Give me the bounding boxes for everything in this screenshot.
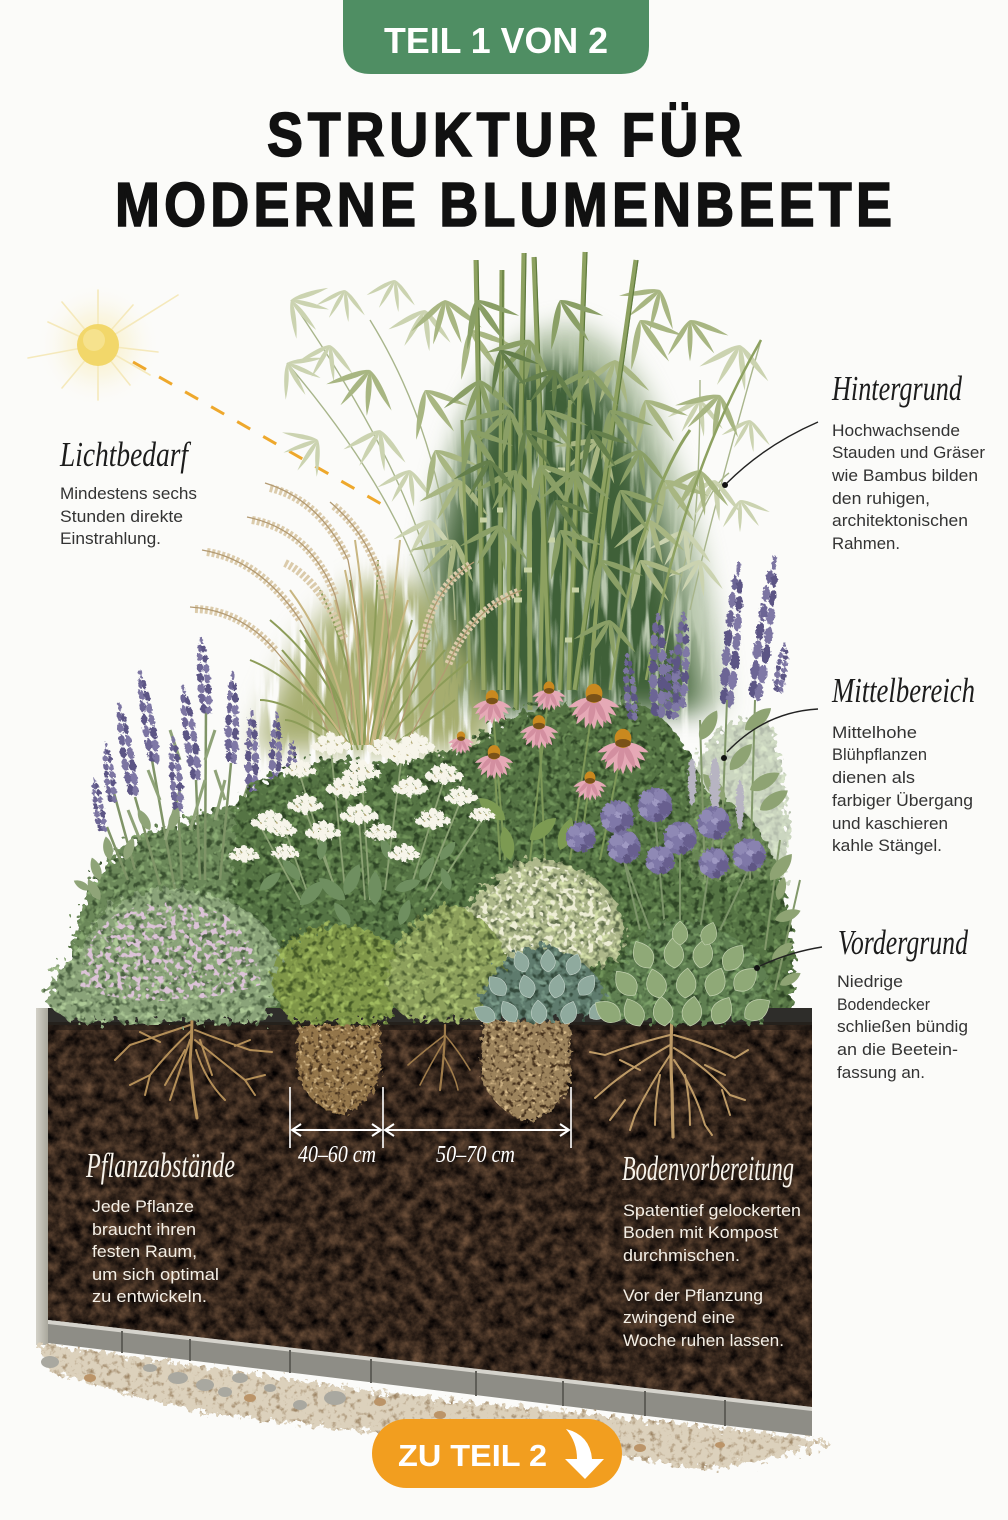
text block: Pflanzabstände: zu entwickeln. [92,1287,207,1306]
text block: Hintergrund: wie Bambus bilden [831,466,978,485]
text block: Lichtbedarf: Stunden direkte [60,507,183,526]
dimension marks: plant spacing: 40–60 cm [298,1142,376,1168]
root ball left [297,1025,381,1115]
text block: Pflanzabstände: Pflanzabstände [85,1146,235,1185]
text block: Hintergrund: den ruhigen, [832,489,930,508]
text block: Pflanzabstände: um sich optimal [92,1265,219,1284]
raised bed soil cross-section [36,1008,812,1408]
text block: Vordergrund: fassung an. [837,1063,925,1082]
text block: Mittelbereich: und kaschieren [832,814,948,833]
header tab: part indicator [343,0,649,74]
text block: Mittelbereich [831,671,975,855]
text block: Mittelbereich: Blühpflanzen [832,745,927,764]
text block: Pflanzabstände: braucht ihren [92,1220,196,1239]
lavender spikes left [88,636,298,833]
dimension marks: plant spacing [290,1087,571,1168]
text block: Mittelbereich: kahle Stängel. [832,836,942,855]
text block: Vordergrund: schließen bündig [837,1017,968,1036]
text block: Mittelbereich: farbiger Übergang [832,791,973,810]
text block: Mittelbereich: Mittelhohe [832,723,917,742]
text block: Bodenvorbereitung: Spatentief gelockerten [623,1201,801,1220]
text block: Lichtbedarf: Mindestens sechs [60,484,197,503]
yarrow leaves and stems [257,750,482,928]
title: MODERNE BLUMENBEETE [115,171,892,240]
pale cream-green mound [461,860,625,976]
text block: Vordergrund: Niedrige [837,972,903,991]
yellow-green mound one [272,925,401,1022]
blue-grey hosta [470,945,613,1027]
text block: Pflanzabstände [85,1146,235,1306]
icon: curved down arrow [565,1429,604,1479]
ornamental grass with plumes [190,483,522,750]
title [115,101,892,240]
roots of perennial left [115,1010,272,1118]
echinacea stems and flowers [448,681,650,861]
text block: Bodenvorbereitung: Boden mit Kompost [623,1223,778,1242]
button: zu Teil 2 [372,1419,622,1488]
text block: Lichtbedarf: Lichtbedarf [59,435,191,474]
lavender spikes right [620,554,791,721]
yarrow white flower heads [229,732,495,863]
sun ray dashed line [133,362,390,509]
text block: Hintergrund: Rahmen. [832,534,900,553]
text block: Hintergrund: Stauden und Gräser [832,443,985,462]
text block: Hintergrund [831,369,985,553]
text block: Hintergrund: Hochwachsende [832,421,960,440]
dimension marks: plant spacing: 50–70 cm [436,1142,515,1168]
purple pompon flowers [566,788,766,930]
text block: Bodenvorbereitung: Bodenvorbereitung [622,1149,794,1188]
pink-lilac ground cover mound [48,888,284,1022]
middle foliage mass [230,702,794,1015]
green hosta [590,920,775,1030]
text block: Lichtbedarf: Einstrahlung. [60,529,161,548]
text block: Bodenvorbereitung: Vor der Pflanzung [623,1286,763,1305]
text block: Mittelbereich: dienen als [832,768,915,787]
text block: Vordergrund: Bodendecker [837,995,930,1014]
text block: Lichtbedarf [59,435,197,548]
text block: Bodenvorbereitung [622,1149,801,1350]
yellow-green mound two [385,905,511,1020]
leader line: Hintergrund [722,422,818,488]
text block: Vordergrund: an die Beetein- [837,1040,958,1059]
text block: Bodenvorbereitung: Woche ruhen lassen. [623,1331,784,1350]
text block: Vordergrund [837,923,968,1082]
text block: Hintergrund: architektonischen [832,511,968,530]
curb stones [48,1320,812,1436]
roots of perennial right [590,1015,748,1137]
text block: Hintergrund: Hintergrund [831,369,962,408]
title: STRUKTUR FÜR [267,101,742,170]
text block: Bodenvorbereitung: durchmischen. [623,1246,740,1265]
leader line: Mittelbereich [721,709,818,761]
root ball right [482,1020,570,1122]
text block: Bodenvorbereitung: zwingend eine [623,1308,735,1327]
left side leafy stems [72,806,183,902]
roots of small plant [408,1025,470,1090]
icon: sun [28,283,178,407]
right side leafy stems [688,700,803,990]
gravel path [38,1345,830,1470]
header tab: part indicator: TEIL 1 VON 2 [384,20,608,61]
button: zu Teil 2: ZU TEIL 2 [398,1438,547,1473]
leader line: Vordergrund [754,947,822,971]
bamboo background plant [269,252,775,710]
text block: Pflanzabstände: Jede Pflanze [92,1197,194,1216]
text block: Pflanzabstände: festen Raum, [92,1242,197,1261]
lavender foliage and stems left [62,707,300,1000]
